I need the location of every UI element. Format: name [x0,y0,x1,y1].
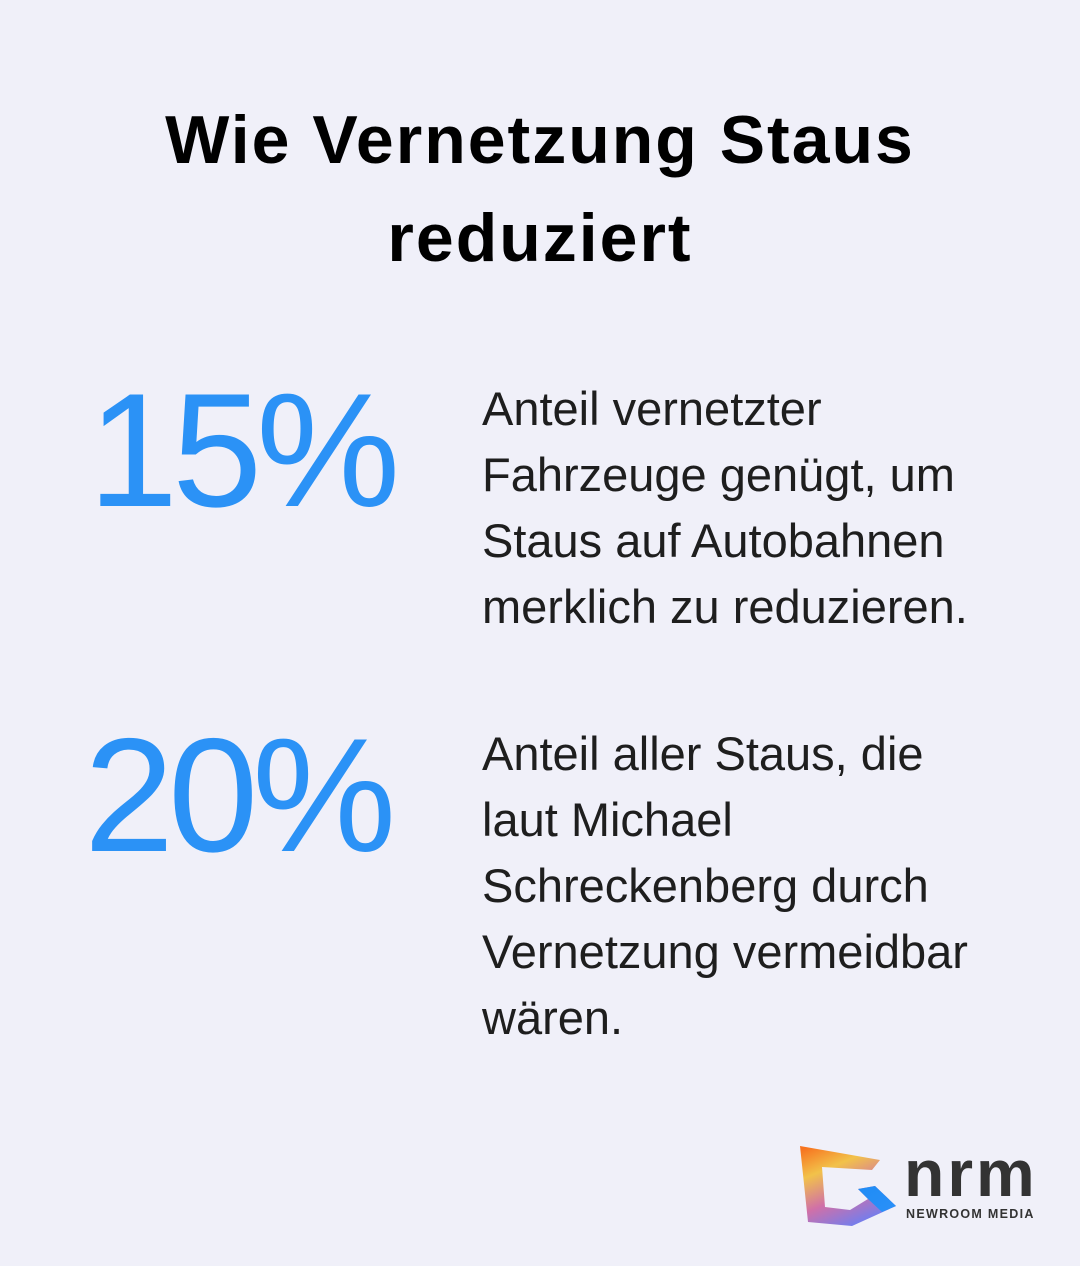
title: Wie Vernetzung Staus [165,102,915,178]
logo text: nrm [904,1136,1038,1210]
logo: newroom media [800,1136,1038,1226]
stat text: 20%: Anteil aller Staus, die [482,727,924,780]
stat text: 15%: Anteil vernetzter [482,382,822,435]
stat text: 20% [482,727,968,1044]
stat number: 15%: 15% [88,360,394,541]
stat text: 15%: merklich zu reduzieren. [482,580,968,633]
stat text: 20%: wären. [482,991,623,1044]
stat text: 20%: Vernetzung vermeidbar [482,925,968,978]
stat text: 20%: laut Michael [482,793,733,846]
stat text: 15%: Staus auf Autobahnen [482,514,945,567]
logo: newroom media: NEWROOM MEDIA [906,1207,1035,1221]
title: reduziert [387,200,693,276]
stat text: 20%: Schreckenberg durch [482,859,929,912]
icon: logo mark [800,1146,896,1226]
title [165,102,915,276]
stat text: 15%: Fahrzeuge genügt, um [482,448,955,501]
stat number: 20%: 20% [84,705,390,886]
stat text: 15% [482,382,968,633]
